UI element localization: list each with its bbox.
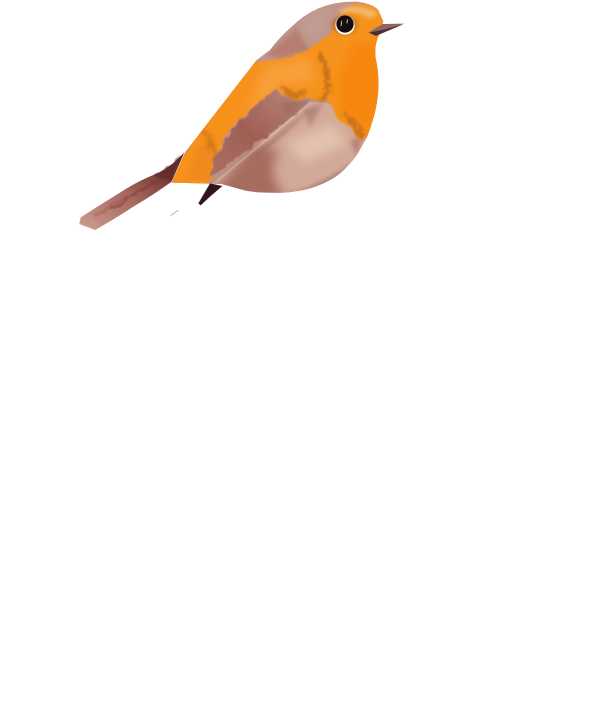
wing tip: [198, 183, 222, 205]
beak: [368, 24, 404, 36]
head and back: [172, 2, 384, 193]
orange shadow markings: [203, 55, 362, 157]
tail: [79, 152, 184, 230]
body: [172, 2, 384, 193]
eye: [332, 15, 357, 35]
wing: [210, 91, 312, 177]
icon: robin bird: [79, 0, 404, 230]
illustration canvas: [79, 2, 404, 230]
wing feather line: [217, 102, 312, 182]
stray feather marks: [171, 210, 179, 216]
belly: [212, 102, 367, 193]
orange plumage: [167, 5, 390, 185]
